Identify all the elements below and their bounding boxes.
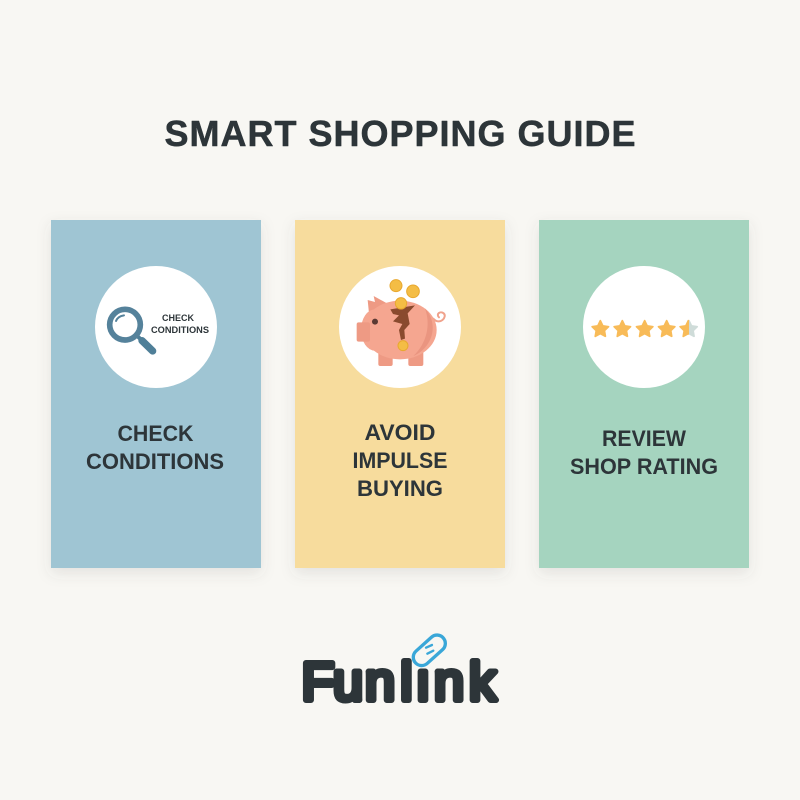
icon circle: check conditions [95,266,217,388]
icon caption [151,313,209,335]
card background: yellow [295,220,505,568]
card background: green [539,220,749,568]
icon circle: piggy bank [339,266,461,388]
card label: IMPULSE [352,448,448,473]
card label [570,426,718,479]
panel: review shop rating [539,220,749,568]
icon caption: CHECK [162,313,194,323]
icon: paperclip link [410,632,449,669]
card label [86,421,224,474]
icon: cracked piggy bank with coins [357,280,445,366]
card label: REVIEW [602,426,686,451]
panel: avoid impulse buying [295,220,505,568]
card label: AVOID [364,420,436,445]
icon: four and a half stars [592,321,697,336]
card label: BUYING [357,476,443,501]
panel: check conditions [51,220,261,568]
title: SMART SHOPPING GUIDE [164,113,636,154]
logo wordmark: Funlink [302,652,497,712]
card label: CHECK [118,421,194,446]
icon caption: CONDITIONS [151,325,209,335]
icon circle: star rating [583,266,705,388]
card label: SHOP RATING [570,454,718,479]
infographic canvas [49,120,751,704]
card background: blue [51,220,261,568]
icon: magnifying glass [110,309,153,351]
logo: Funlink [302,632,497,712]
card label: CONDITIONS [86,449,224,474]
i-dot mask [414,655,432,668]
card label [352,420,448,501]
